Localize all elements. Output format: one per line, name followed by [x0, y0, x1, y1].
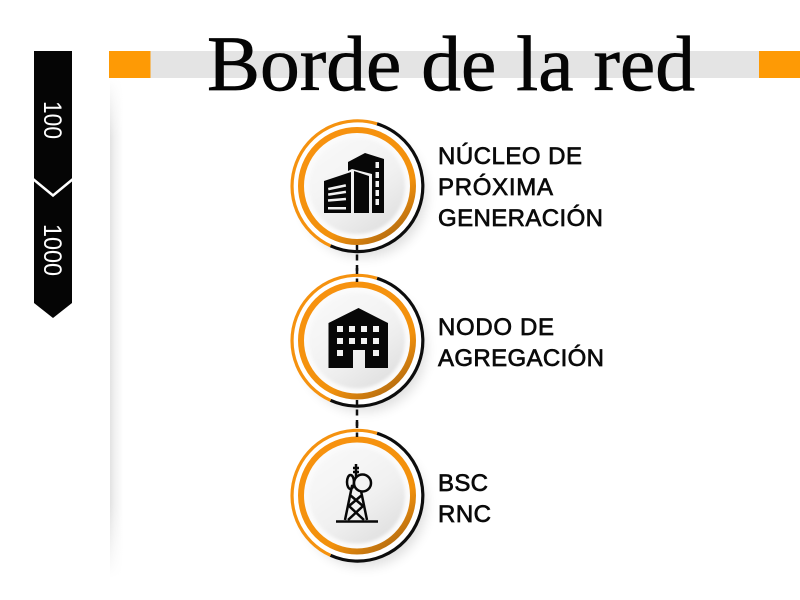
- label: BSC RNC: RNC: [438, 501, 491, 528]
- icon: building: [328, 308, 388, 368]
- label: next generation core: GENERACIÓN: [438, 205, 603, 232]
- icon: office buildings: [324, 153, 384, 213]
- label: next generation core: PRÓXIMA: [438, 174, 553, 201]
- header band: [109, 51, 800, 78]
- label: BSC RNC: BSC: [438, 470, 488, 497]
- node: aggregation node: [292, 268, 426, 412]
- label: BSC RNC: [438, 470, 491, 528]
- title: Borde de la red: [207, 20, 695, 107]
- label: aggregation node: AGREGACIÓN: [438, 345, 604, 372]
- connector lines: [356, 244, 358, 437]
- label: next generation core: [438, 143, 603, 232]
- label: aggregation node: NODO DE: [438, 314, 554, 341]
- label: next generation core: NÚCLEO DE: [438, 143, 582, 170]
- icon: antenna tower: [336, 464, 378, 522]
- label: 1000: 1000: [38, 224, 66, 276]
- node: BSC RNC: [292, 422, 426, 566]
- range arrow: 100 to 1000: [33, 51, 73, 318]
- label: aggregation node: [438, 314, 604, 372]
- node: next generation core: [292, 121, 426, 257]
- left sidebar shadow: [110, 78, 123, 578]
- label: 100: 100: [38, 101, 66, 139]
